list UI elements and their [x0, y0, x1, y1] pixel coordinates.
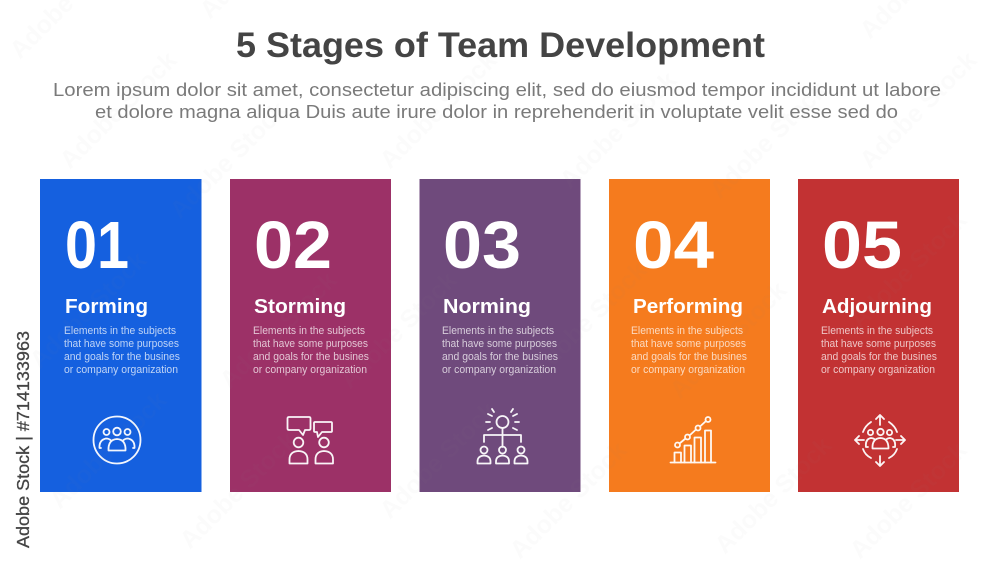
- watermark pattern: Adobe Stock: [664, 276, 792, 404]
- panel: 01 Forming: that have some purposes: [64, 338, 179, 350]
- panel: 03 Norming: or company organization: [442, 364, 556, 376]
- watermark pattern: Adobe Stock: [709, 431, 837, 559]
- panel: 05 Adjourning: that have some purposes: [821, 338, 936, 350]
- watermark pattern: Adobe Stock: [504, 436, 632, 563]
- panel: 01 Forming: or company organization: [64, 364, 178, 376]
- panel: 05 Adjourning: Elements in the subjects: [821, 325, 933, 337]
- panel: 01 Forming: [40, 179, 202, 492]
- title: 5 Stages of Team Development: [236, 26, 765, 65]
- watermark pattern: Adobe Stock: [524, 256, 652, 384]
- watermark pattern: Adobe Stock: [214, 266, 342, 394]
- panel: 01 Forming: 01: [65, 208, 129, 283]
- panel: 05 Adjourning: [798, 179, 959, 492]
- subtitle text: Lorem ipsum dolor sit amet, consectetur adipiscing elit, sed do eiusmod tempor incididunt ut labore: [53, 79, 941, 100]
- panel: 02 Storming: and goals for the busines: [253, 351, 369, 363]
- panel: 01 Forming: and goals for the busines: [64, 351, 180, 363]
- icon: rising bar chart: [670, 417, 716, 462]
- panel: 05 Adjourning: or company organization: [821, 364, 935, 376]
- panel: 02 Storming: Storming: [254, 296, 346, 318]
- panel: 03 Norming: [420, 179, 580, 492]
- panel: 02 Storming: 02: [254, 208, 332, 283]
- watermark pattern: Adobe Stock: [54, 46, 182, 174]
- panel: 03 Norming: Norming: [443, 296, 531, 318]
- watermark pattern: Adobe Stock: [374, 46, 502, 174]
- watermark pattern: Adobe Stock: [334, 266, 462, 394]
- watermark pattern: Adobe Stock: [374, 396, 502, 524]
- panel: 04 Performing: 04: [633, 208, 714, 283]
- watermark pattern: Adobe Stock: [844, 206, 972, 334]
- watermark pattern: Adobe Stock: [24, 246, 152, 374]
- side credit text: Adobe Stock | #714133963: [13, 331, 33, 548]
- watermark pattern: Adobe Stock: [704, 76, 832, 204]
- panel: 05 Adjourning: Adjourning: [822, 296, 932, 318]
- panel: 04 Performing: and goals for the busines: [631, 351, 747, 363]
- panel: 05 Adjourning: 05: [822, 208, 902, 283]
- subtitle text: et dolore magna aliqua Duis aute irure dolor in reprehenderit in voluptate velit esse sed do: [95, 101, 898, 122]
- panel: 03 Norming: Elements in the subjects: [442, 325, 554, 337]
- panel: 04 Performing: Elements in the subjects: [631, 325, 743, 337]
- panel: 02 Storming: or company organization: [253, 364, 367, 376]
- icon: team with outward arrows: [855, 415, 905, 466]
- icon: two people talking: [288, 417, 333, 464]
- panel: 03 Norming: that have some purposes: [442, 338, 557, 350]
- panel: 04 Performing: Performing: [633, 296, 743, 318]
- panel: 02 Storming: that have some purposes: [253, 338, 368, 350]
- watermark pattern: Adobe Stock: [844, 436, 972, 563]
- panel: 03 Norming: and goals for the busines: [442, 351, 558, 363]
- subtitle text: [53, 79, 941, 122]
- panel: 05 Adjourning: and goals for the busines: [821, 351, 937, 363]
- watermark pattern: Adobe Stock: [174, 426, 302, 554]
- watermark pattern: Adobe Stock: [44, 386, 172, 514]
- icon: leader with idea and team: [478, 409, 528, 464]
- icon: team in circle: [94, 416, 140, 464]
- panel: 01 Forming: Elements in the subjects: [64, 325, 176, 337]
- panel: 01 Forming: Forming: [65, 296, 148, 318]
- panel: 03 Norming: 03: [443, 208, 521, 283]
- watermark pattern: Adobe Stock: [164, 96, 292, 224]
- watermark pattern: Adobe Stock: [854, 46, 982, 174]
- watermark pattern: Adobe Stock: [554, 66, 682, 194]
- panel: 04 Performing: [609, 179, 770, 492]
- panel: 04 Performing: that have some purposes: [631, 338, 746, 350]
- panel: 02 Storming: Elements in the subjects: [253, 325, 365, 337]
- panel: 02 Storming: [230, 179, 391, 492]
- panel: 04 Performing: or company organization: [631, 364, 745, 376]
